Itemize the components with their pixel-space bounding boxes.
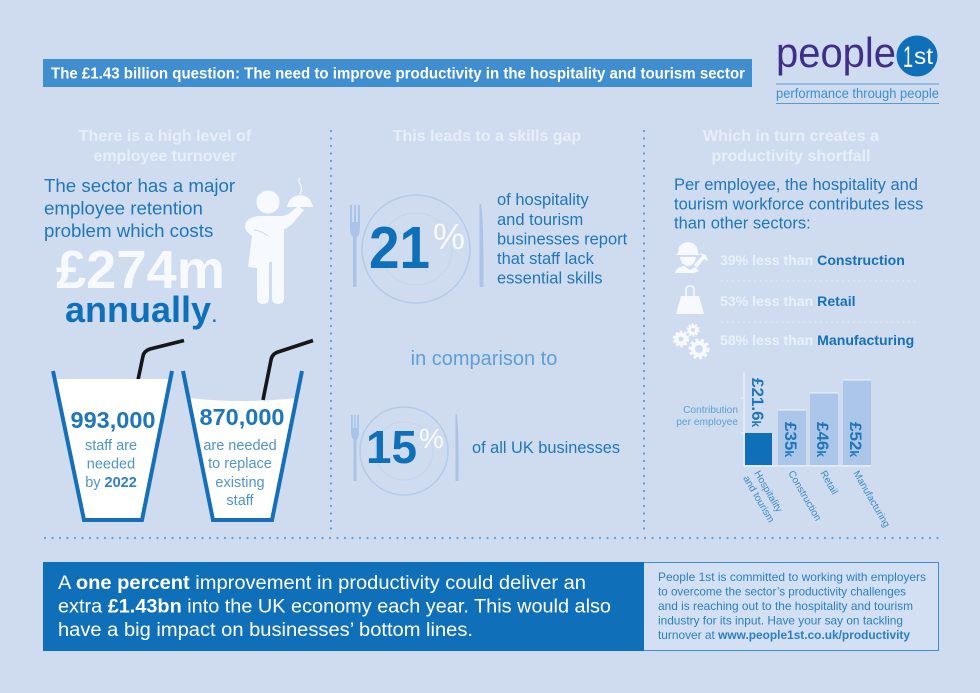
logo: people 1st	[776, 29, 939, 104]
bar: retail	[810, 393, 838, 465]
text block: 21% description: and tourism	[497, 211, 583, 229]
panel: productivity shortfall	[674, 128, 923, 529]
glass: 870,000: to replace	[208, 456, 272, 472]
category labels: Hospitality	[751, 469, 784, 514]
bar chart: contribution per employee	[676, 372, 892, 529]
figure: annually: annually.	[65, 289, 218, 330]
category labels: Manufacturing	[850, 469, 892, 529]
heading: turnover: employee turnover	[93, 148, 237, 165]
row: manufacturing: 58% less than Manufacturing	[720, 332, 914, 348]
bar: manufacturing	[843, 380, 871, 465]
icon: shopping bag	[676, 286, 704, 314]
bar: hospitality and tourism: £21.6 k	[748, 378, 767, 428]
text block: per employee: Per employee, the hospitality and	[674, 176, 918, 194]
glass: 870,000	[183, 340, 313, 520]
category labels: Retail	[817, 469, 840, 497]
glass: 993,000: needed	[87, 456, 135, 472]
text block: retention problem: employee retention	[44, 198, 203, 218]
text block: per employee: tourism workforce contributes less	[674, 196, 923, 214]
panel: skills gap: %	[419, 423, 444, 454]
text block: people 1st commitment: and is reaching out to the hospitality and tourism	[658, 599, 913, 613]
category labels: Construction	[785, 469, 823, 523]
text block: 21% description: businesses report	[497, 230, 628, 248]
row: construction: 39% less than Construction	[720, 252, 905, 268]
heading: productivity shortfall: productivity shortfall	[711, 148, 871, 165]
text block: retention problem: problem which costs	[44, 220, 213, 241]
glass: 993,000: 993,000	[71, 407, 155, 433]
text block: one percent improvement: A one percent improvement in productivity could deliver an	[58, 573, 586, 594]
stat: 21%: 21	[369, 215, 430, 281]
logo: people 1st: 1	[903, 41, 913, 74]
glass: 993,000	[53, 340, 184, 520]
logo: people 1st: people	[776, 29, 896, 76]
bar: hospitality and tourism	[745, 378, 772, 465]
text block: people 1st commitment: to overcome the sector’s productivity challenges	[658, 584, 906, 598]
glass: 870,000: existing	[215, 475, 265, 491]
glass: 993,000: staff are	[85, 438, 137, 454]
bar: retail: £46 k	[813, 422, 832, 457]
text block: people 1st commitment	[658, 570, 926, 642]
panel: employee turnover	[44, 128, 313, 520]
text block: people 1st commitment: People 1st is committed to working with employers	[658, 570, 926, 584]
heading: turnover: There is a high level of	[79, 128, 251, 145]
text block: people 1st commitment: turnover at www.people1st.co.uk/productivity	[658, 628, 910, 642]
heading: skills gap: This leads to a skills gap	[393, 128, 581, 145]
text block: retention problem: The sector has a major	[44, 175, 235, 196]
text block: per employee: than other sectors:	[674, 214, 811, 232]
panel: skills gap	[350, 128, 628, 495]
logo: people 1st: st	[914, 43, 934, 69]
bar: construction	[778, 410, 806, 465]
text: in comparison to: in comparison to	[411, 348, 557, 370]
icon: construction worker	[675, 242, 708, 273]
title bar: The £1.43 billion question: The need to improve productivity in the hospitality and tourism sector	[51, 66, 745, 82]
text block: 21% description: of hospitality	[497, 191, 589, 209]
text block: 21% description: that staff lack	[497, 250, 595, 268]
glass: 870,000: 870,000	[200, 404, 284, 430]
icon: plate 21%	[350, 195, 484, 303]
stat: 15%: 15	[366, 421, 417, 473]
glass: 870,000: staff	[226, 493, 255, 509]
text block: people 1st commitment: industry for its input. Have your say on tackling	[658, 614, 903, 628]
category labels	[740, 469, 892, 529]
glass: 993,000: by 2022	[85, 475, 137, 491]
text block: 21% description: essential skills	[497, 270, 602, 288]
panel: skills gap: %	[433, 216, 465, 257]
row: retail: 53% less than Retail	[720, 293, 856, 309]
heading: productivity shortfall: Which in turn creates a	[703, 128, 879, 145]
axis label: Contribution	[683, 405, 738, 416]
panel: bottom callout: extra £1.43bn into the UK economy each year. This would also	[58, 596, 611, 618]
icon: plate 15%	[351, 407, 459, 495]
category labels: and tourism	[740, 474, 776, 525]
logo: people 1st: performance through people	[776, 85, 939, 101]
title bar	[43, 59, 752, 87]
bar: construction: £35 k	[781, 422, 800, 457]
text block: 15% description: of all UK businesses	[472, 439, 620, 457]
figure: £274m: £274m	[56, 240, 225, 300]
icon: gears	[674, 324, 708, 358]
bar: manufacturing: £52 k	[846, 422, 865, 457]
panel: bottom callout: have a big impact on businesses’ bottom lines.	[58, 620, 473, 641]
panel: bottom callout	[43, 562, 938, 651]
glass: 870,000: are needed	[203, 438, 277, 454]
axis label: per employee	[676, 417, 738, 428]
icon: waiter	[245, 178, 313, 304]
